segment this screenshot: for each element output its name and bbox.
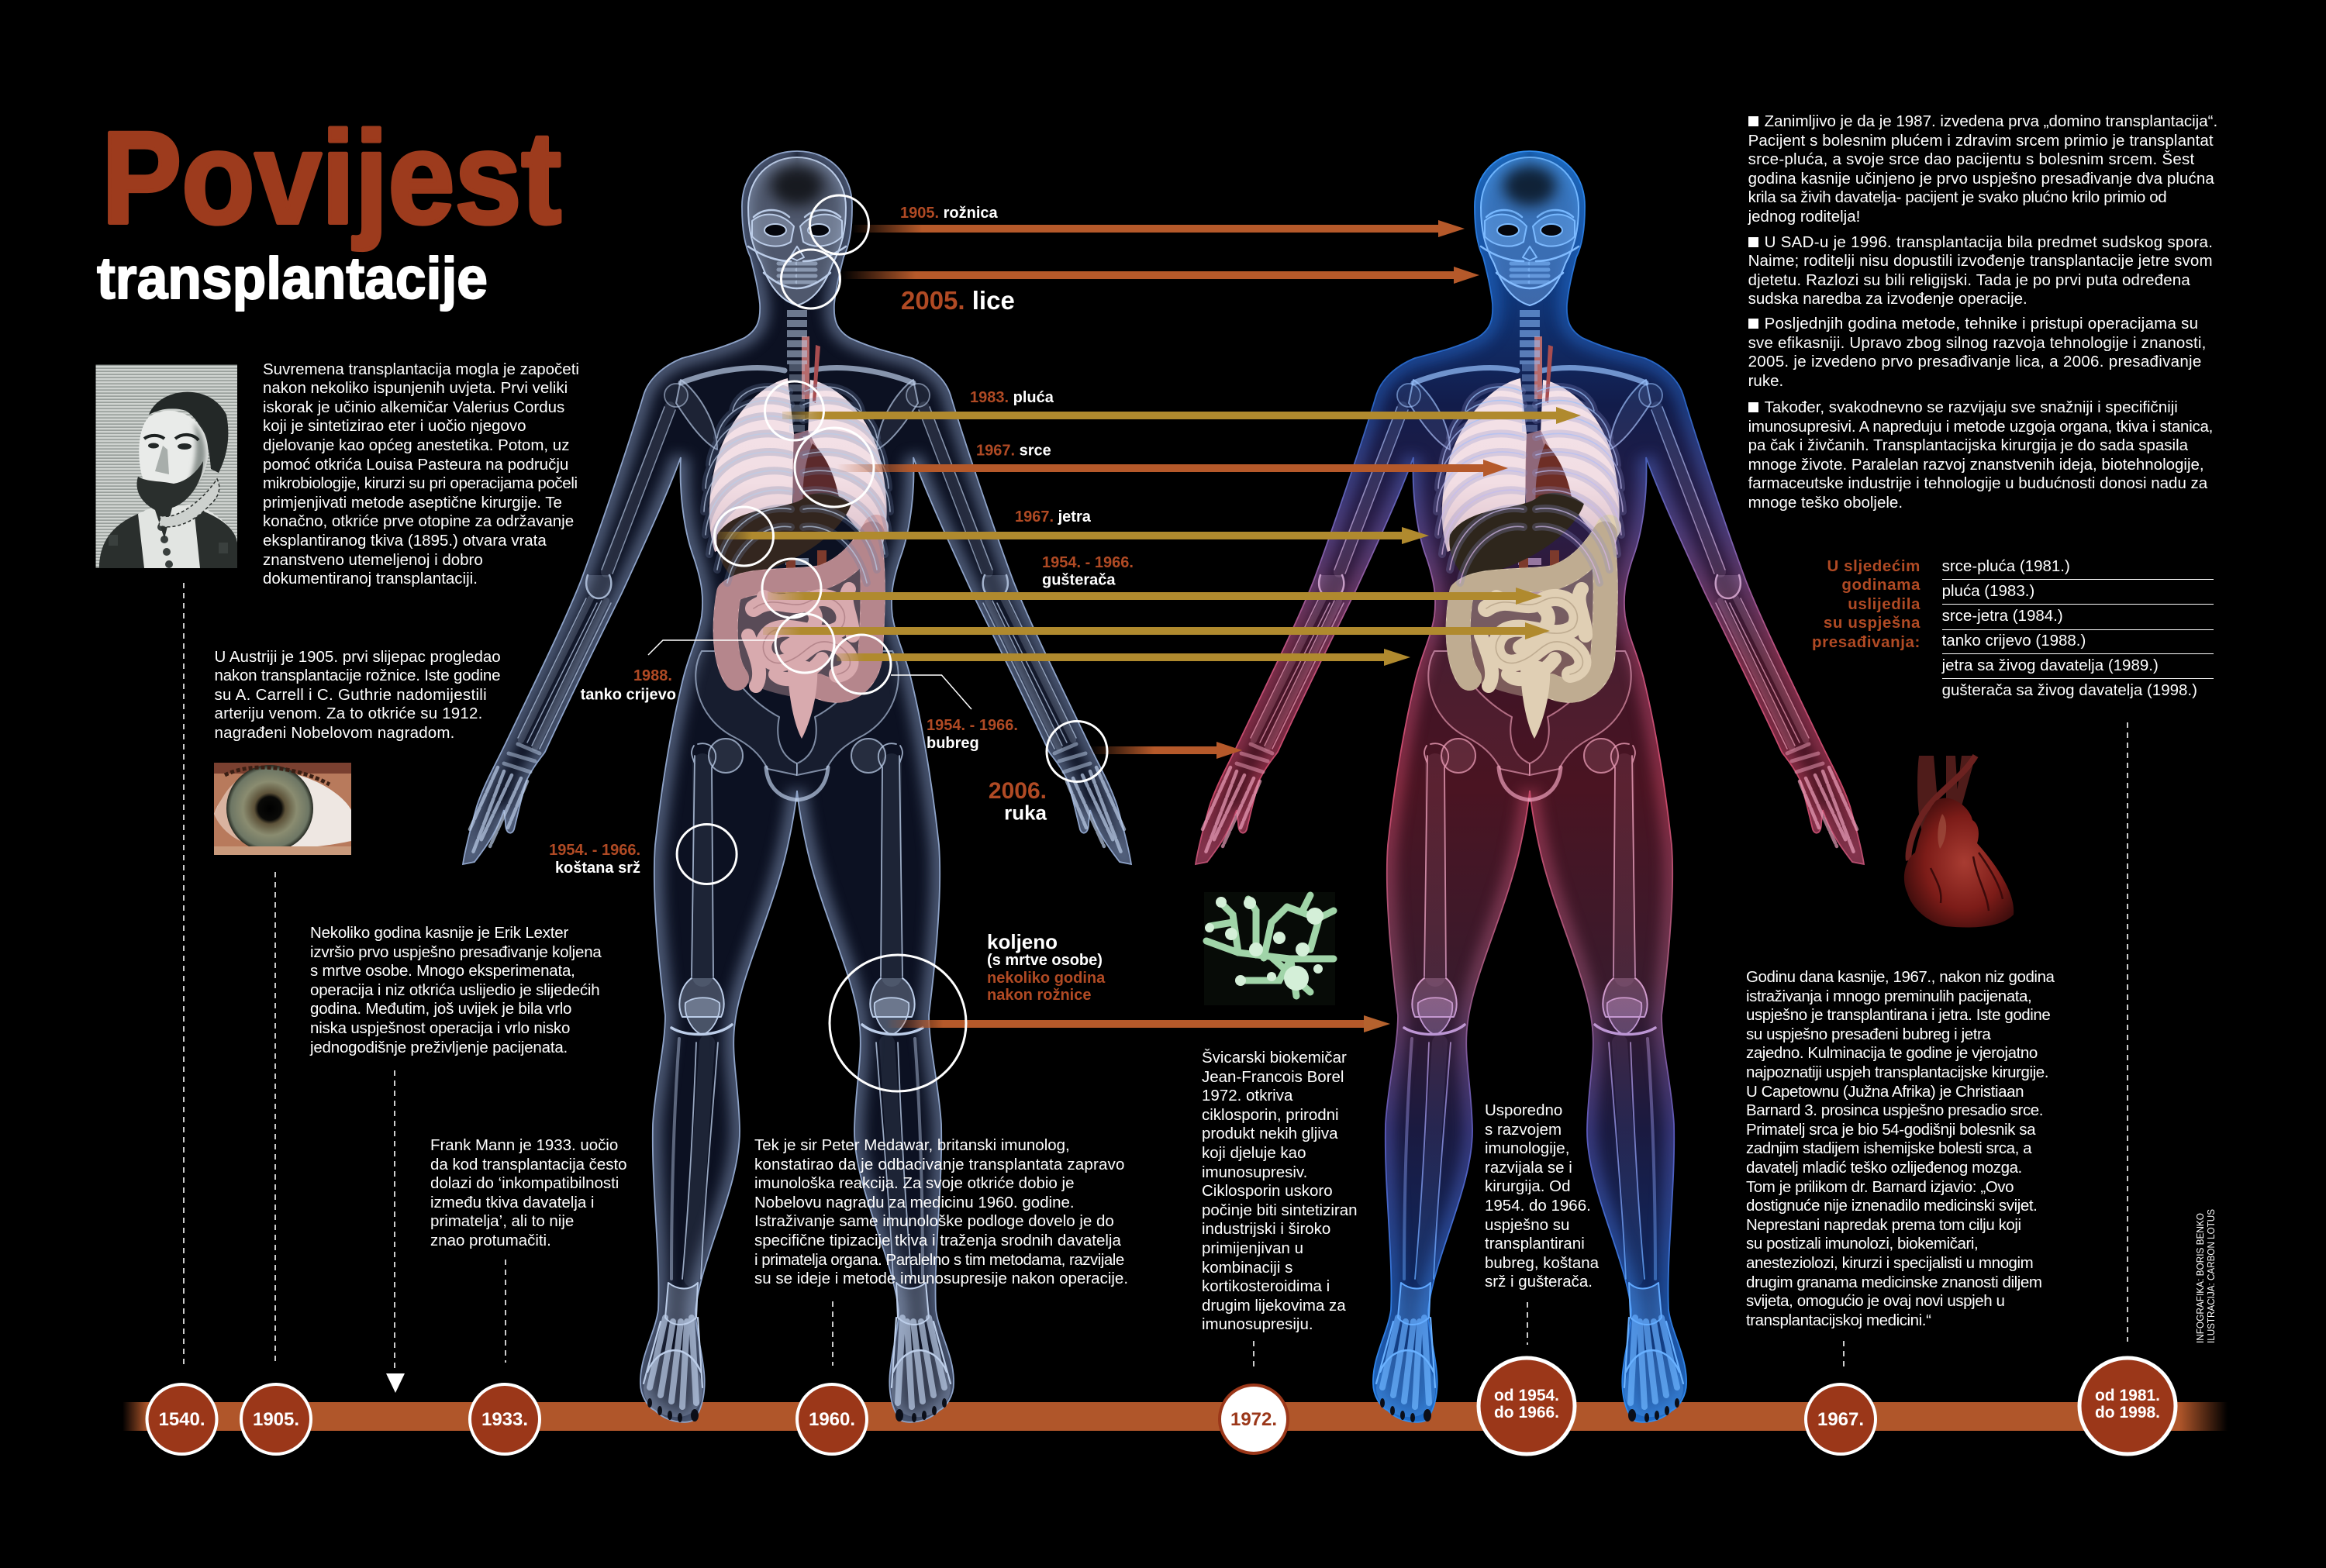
image: engraved portrait of Valerius Cordus [96, 364, 237, 568]
text block: 1905 [214, 648, 501, 742]
text block: 1967: Godinu dana kasnije, 1967., nakon niz godina [1746, 968, 2055, 986]
timeline marker 1981-1998: do 1998. [2095, 1404, 2160, 1422]
text block: 1960: Tek je sir Peter Medawar, britanski imunolog, [754, 1136, 1070, 1154]
text block: 1933: između tkiva davatelja i [430, 1194, 594, 1211]
arrow: srce [837, 460, 1508, 477]
timeline marker 1967 [1806, 1384, 1876, 1454]
arrow: tanko crijevo [763, 622, 1550, 639]
text block: 1954-1966: transplantirani [1485, 1235, 1585, 1253]
text block: 1972: kombinaciji s [1202, 1259, 1292, 1277]
label: koštana srž: 1954. - 1966. [549, 842, 640, 859]
fact: immunosuppressants: imunosupresivi. A napreduju i metode uzgoja organa, tkiva i stanica, [1748, 418, 2213, 436]
text block: intro: eksplantiranog tkiva (1895.) otvara vrata [263, 532, 547, 550]
fact: immunosuppressants: Također, svakodnevno se razvijaju sve snažniji i specifičniji [1765, 398, 2178, 416]
text block: 1967: zadnjim stadijem ishemijske bolesti srca, a [1746, 1139, 2031, 1157]
label: 1967 jetra: 1967. jetra [1015, 508, 1092, 526]
text block: 1972: Jean-Francois Borel [1202, 1068, 1344, 1086]
fact: immunosuppressants: pa čak i živčanih. Transplantacijska kirurgija je do sada spasila [1748, 436, 2188, 454]
arrow: gušterača [768, 588, 1542, 605]
text block: 1905: arteriju venom. Za to otkriće su 1912. [214, 705, 483, 722]
list heading [1812, 557, 1921, 651]
text block: intro: koji je sintetizirao eter i uočio njegovo [263, 417, 526, 435]
text block: knee: izvršio prvo uspješno presađivanje koljena [310, 943, 602, 961]
list: later transplants: srce-jetra (1984.) [1942, 607, 2063, 625]
text block: 1967: davatelj mladić teško ozlijeđenog mozga. [1746, 1159, 2022, 1177]
label: tanko crijevo: 1988. [633, 667, 672, 684]
text block: 1954-1966: 1954. do 1966. [1485, 1197, 1591, 1215]
label: tanko crijevo: tanko crijevo [581, 687, 676, 704]
fact: immunosuppressants: mnoge živote. Paralelan razvoj znanstvenih ideja, biotehnologije, [1748, 456, 2204, 474]
list: later transplants: srce-pluća (1981.) [1942, 557, 2070, 575]
text block: 1967: dostignuće nije iznenadilo medicinski svijet. [1746, 1197, 2037, 1215]
list: later transplants: tanko crijevo (1988.) [1942, 632, 2086, 650]
text block: 1972: primijenjivan u [1202, 1239, 1303, 1257]
text block: knee: operacija i niz otkrića uslijedio je slijedećih [310, 981, 599, 999]
text block: 1967: Tom je prilikom dr. Barnard izjavio: „Ovo [1746, 1178, 2014, 1196]
text block: intro: djelovanje kao općeg anestetika. Potom, uz [263, 436, 569, 454]
text block: 1967: zajedno. Kulminacija te godine je vjerojatno [1746, 1044, 2038, 1062]
label: koljeno: nakon rožnice [987, 987, 1091, 1004]
list heading: U sljedećim [1827, 557, 1921, 575]
fact: immunosuppressants: farmaceutske industrije i tehnologije u budućnosti donosi nadu za [1748, 474, 2207, 492]
text block: 1954-1966: imunologije, [1485, 1139, 1569, 1157]
timeline marker 1981-1998 [2079, 1358, 2176, 1454]
list: later transplants: gušterača sa živog davatelja (1998.) [1942, 681, 2197, 699]
label: 1983 pluća: 1983. pluća [970, 389, 1054, 406]
text block: 1967 [1746, 968, 2055, 1329]
timeline marker 1540: 1540. [158, 1409, 205, 1430]
text block: knee: Nekoliko godina kasnije je Erik Lexter [310, 924, 568, 942]
text block: 1960: imunološka reakcija. Za svoje otkriće dobio je [754, 1174, 1074, 1192]
arrow: rožnica [851, 220, 1465, 237]
text block: 1954-1966: uspješno su [1485, 1216, 1569, 1234]
timeline marker 1954-1966: od 1954. [1494, 1387, 1559, 1404]
timeline marker 1960: 1960. [809, 1409, 855, 1430]
text block: 1933: dolazi do ‘inkompatibilnosti [430, 1174, 619, 1192]
text block: 1905: su A. Carrell i C. Guthrie nadomijestili [214, 686, 487, 704]
fact: recent methods: 2005. je izvedeno prvo presađivanje lica, a 2006. presađivanje [1748, 353, 2202, 370]
timeline marker 1933 [470, 1384, 540, 1454]
text block: 1905: U Austriji je 1905. prvi slijepac progledao [214, 648, 501, 666]
list: later transplants [1941, 557, 2214, 699]
leader lines [648, 640, 971, 709]
text block: 1967: Neprestani napredak prema tom cilju koji [1746, 1216, 2021, 1234]
list heading: uslijedila [1848, 595, 1921, 613]
text block: 1972: Ciklosporin uskoro [1202, 1182, 1333, 1200]
fact: domino transplantation: srce-pluća, a svoje srce dao pacijentu s bolesnim srcem. Šest [1748, 150, 2194, 168]
fact: domino transplantation: godina kasnije učinjeno je prvo uspješno presađivanje dva plućna [1748, 170, 2214, 188]
timeline marker 1954-1966 [1479, 1358, 1575, 1454]
arrow: jetra [718, 527, 1429, 544]
text block: intro: dokumentiranoj transplantaciji. [263, 570, 478, 588]
text block: 1972: industrijski i široko [1202, 1220, 1330, 1238]
text block: intro: nakon nekoliko ispunjenih uvjeta. Prvi veliki [263, 379, 568, 397]
text block: 1972: imunosupresiv. [1202, 1163, 1307, 1181]
text block: 1972: ciklosporin, prirodni [1202, 1106, 1339, 1124]
title: Povijest [102, 104, 561, 251]
text block: 1972: produkt nekih gljiva [1202, 1125, 1338, 1142]
image: anatomical heart [1904, 756, 2014, 927]
label: koljeno: (s mrtve osobe) [987, 952, 1103, 969]
text block: intro: Suvremena transplantacija mogla je započeti [263, 360, 579, 378]
text block: 1972: kortikosteroidima i [1202, 1277, 1330, 1295]
fact: court dispute [1748, 233, 2213, 308]
text block: 1960 [754, 1136, 1128, 1287]
fact: recent methods: sve efikasniji. Upravo zbog silnog razvoja tehnologije i znanosti, [1748, 334, 2207, 352]
list: later transplants: pluća (1983.) [1942, 582, 2034, 600]
fact: immunosuppressants: mnoge teško oboljele. [1748, 494, 1903, 512]
timeline marker 1905 [241, 1384, 311, 1454]
text block: 1967: transplantacijskoj medicini.“ [1746, 1311, 1931, 1329]
text block: 1972: počinje biti sintetiziran [1202, 1201, 1358, 1219]
text block: intro: pomoć otkrića Louisa Pasteura na području [263, 456, 568, 474]
fact: court dispute: sudska naredba za izvođenje operacije. [1748, 290, 2027, 308]
image: Tolypocladium fungus micrograph [1204, 892, 1335, 1005]
timeline marker 1954-1966: do 1966. [1494, 1404, 1559, 1422]
timeline marker 1960 [797, 1384, 867, 1454]
text block: 1967: su postizali imunolozi, biokemičari, [1746, 1235, 1978, 1253]
dashed connector lines to timeline [184, 583, 2128, 1370]
fact: recent methods: ruke. [1748, 372, 1783, 390]
label: gušterača: gušterača [1042, 572, 1116, 589]
fact: domino transplantation [1748, 112, 2217, 226]
text block: 1933: Frank Mann je 1933. uočio [430, 1136, 618, 1154]
fact: recent methods [1748, 315, 2207, 390]
arrow: koljeno [885, 1015, 1390, 1032]
text block: intro: znanstveno utemeljenoj i dobro [263, 551, 483, 569]
list: later transplants: jetra sa živog davatelja (1989.) [1942, 656, 2159, 674]
timeline marker 1967: 1967. [1817, 1409, 1864, 1430]
label: koljeno: koljeno [987, 930, 1058, 953]
label: 1967 srce: 1967. srce [976, 442, 1051, 459]
fact: domino transplantation: jednog roditelja! [1748, 208, 1860, 226]
list heading: godinama [1841, 576, 1921, 594]
fact: domino transplantation: krila sa živih davatelja- pacijent je svako plućno krilo primio od [1748, 188, 2166, 206]
text block: 1954-1966: razvijala se i [1485, 1159, 1572, 1177]
highlight circles on donor organs [677, 195, 1107, 1091]
text block: 1905: nakon transplantacije rožnice. Iste godine [214, 667, 500, 684]
text block: 1933: da kod transplantacija često [430, 1156, 627, 1173]
label: koštana srž: koštana srž [555, 860, 640, 877]
text block: 1954-1966: Usporedno [1485, 1101, 1562, 1119]
credits [2195, 1209, 2217, 1343]
text block: 1967: uspješno je transplantirana i jetra. Iste godine [1746, 1006, 2050, 1024]
text block: intro: primjenjivati metode aseptične kirurgije. Te [263, 494, 562, 512]
timeline marker 1933: 1933. [481, 1409, 528, 1430]
arrow: ruka [1089, 742, 1242, 759]
fact: domino transplantation: Zanimljivo je da je 1987. izvedena prva „domino transplantacija“. [1765, 112, 2217, 130]
text block: 1933: primatelja’, ali to nije [430, 1212, 574, 1230]
text block: 1972: koji djeluje kao [1202, 1144, 1306, 1162]
label: ruka: ruka [1004, 801, 1047, 825]
text block: facts column [1748, 112, 2217, 512]
text block: 1967: najpoznatiji uspjeh transplantacijske kirurgije. [1746, 1063, 2048, 1081]
arrow: lice [842, 267, 1479, 284]
text block: intro: mikrobiologije, kirurzi su pri operacijama počeli [263, 474, 578, 492]
arrow: bubreg [837, 649, 1410, 666]
credits: ILUSTRACIJA: CARBON LOTUS [2206, 1209, 2217, 1343]
text block: knee: godina. Međutim, još uvijek je bila vrlo [310, 1000, 571, 1018]
timeline bar [123, 1402, 2228, 1431]
text block: 1960: konstatirao da je odbacivanje transplantata zapravo [754, 1156, 1125, 1173]
text block: 1960: su se ideje i metode imunosupresije nakon operacije. [754, 1270, 1128, 1287]
text block: 1960: Istraživanje same imunološke podloge dovelo je do [754, 1212, 1114, 1230]
list heading: su uspješna [1824, 614, 1921, 632]
image: human eye close-up [214, 763, 351, 855]
text block: 1972: Švicarski biokemičar [1202, 1049, 1347, 1067]
text block: intro: iskorak je učinio alkemičar Valerius Cordus [263, 398, 564, 416]
arrow: pluća [782, 407, 1581, 424]
text block: 1967: anesteziolozi, kirurzi i specijalisti u mnogim [1746, 1254, 2033, 1272]
text block: knee: s mrtve osobe. Mnogo eksperimenata, [310, 962, 575, 980]
text block: knee [310, 924, 602, 1056]
text block: knee: jednogodišnje preživljenje pacijenata. [310, 1039, 568, 1056]
text block: intro: konačno, otkriće prve otopine za održavanje [263, 512, 574, 530]
fact: court dispute: Naime; roditelji nisu dopustili izvođenje transplantacije jetre svom [1748, 252, 2213, 270]
figure: donor body, blue-grey x-ray [463, 151, 1131, 1422]
figure: recipient body, blue to red x-ray [1196, 151, 1864, 1422]
text block: 1972: 1972. otkriva [1202, 1087, 1292, 1104]
fact: recent methods: Posljednjih godina metode, tehnike i pristupi operacijama su [1765, 315, 2198, 333]
subtitle: transplantacije [97, 246, 488, 312]
text block: 1967: Primatelj srca je bio 54-godišnji bolesnik sa [1746, 1121, 2035, 1139]
text block: 1972 [1202, 1049, 1358, 1333]
fact: court dispute: djetetu. Razlozi su bili religijski. Tada je po prvi puta određena [1748, 271, 2190, 289]
text block: 1967: su uspješno presađeni bubreg i jetra [1746, 1025, 1990, 1043]
fact: court dispute: U SAD-u je 1996. transplantacija bila predmet sudskog spora. [1765, 233, 2213, 251]
text block: 1954-1966: s razvojem [1485, 1121, 1562, 1139]
text block: 1967: U Capetownu (Južna Afrika) je Christiaan [1746, 1083, 2024, 1101]
list heading: presađivanja: [1812, 633, 1921, 651]
text block: 1972: drugim lijekovima za [1202, 1297, 1346, 1315]
timeline marker 1972: 1972. [1230, 1409, 1277, 1430]
label: 1905 rožnica: 1905. rožnica [900, 205, 999, 222]
timeline marker 1972 [1220, 1385, 1288, 1453]
text block: 1960: Nobelovu nagradu za medicinu 1960. godine. [754, 1194, 1075, 1211]
text block: 1960: i primatelja organa. Paralelno s tim metodama, razvijale [754, 1251, 1124, 1269]
text block: 1967: istraživanja i mnogo preminulih pacijenata, [1746, 987, 2031, 1005]
fact: immunosuppressants [1748, 398, 2213, 512]
timeline marker 1905: 1905. [253, 1409, 299, 1430]
label: bubreg: 1954. - 1966. [927, 717, 1018, 734]
text block: 1954-1966: srž i gušterača. [1485, 1273, 1593, 1291]
text block: knee: niska uspješnost operacija i vrlo nisko [310, 1019, 570, 1037]
timeline marker 1981-1998: od 1981. [2095, 1387, 2160, 1404]
text block: intro [263, 360, 579, 588]
text block: 1933: znao protumačiti. [430, 1232, 551, 1249]
arrowhead: Lexter pointer [386, 1373, 405, 1393]
text block: 1954-1966: kirurgija. Od [1485, 1177, 1571, 1195]
text block: 1967: Barnard 3. prosinca uspješno presadio srce. [1746, 1101, 2043, 1119]
credits: INFOGRAFIKA: BORIS BENKO [2195, 1213, 2206, 1343]
text block: 1954-1966: bubreg, koštana [1485, 1254, 1599, 1272]
text block: 1967: svijeta, omogućio je ovaj novi uspjeh u [1746, 1292, 2004, 1310]
label: bubreg: bubreg [927, 735, 979, 752]
text block: 1967: drugim granama medicinske znanosti diljem [1746, 1273, 2042, 1291]
fact: domino transplantation: Pacijent s bolesnim plućem i zdravim srcem primio je transplantat [1748, 132, 2214, 150]
text block: 1933 [430, 1136, 627, 1249]
label: gušterača: 1954. - 1966. [1042, 554, 1134, 571]
label: koljeno: nekoliko godina [987, 970, 1106, 987]
text block: 1972: imunosupresiju. [1202, 1315, 1313, 1333]
label: 2005 lice: 2005. lice [901, 286, 1015, 315]
timeline marker 1540 [147, 1384, 217, 1454]
label: ruka: 2006. [989, 778, 1047, 804]
text block: 1960: specifične tipizacije tkiva i traženja srodnih davatelja [754, 1232, 1121, 1249]
text block: 1954-1966 [1485, 1101, 1599, 1291]
text block: 1905: nagrađeni Nobelovom nagradom. [214, 724, 455, 742]
